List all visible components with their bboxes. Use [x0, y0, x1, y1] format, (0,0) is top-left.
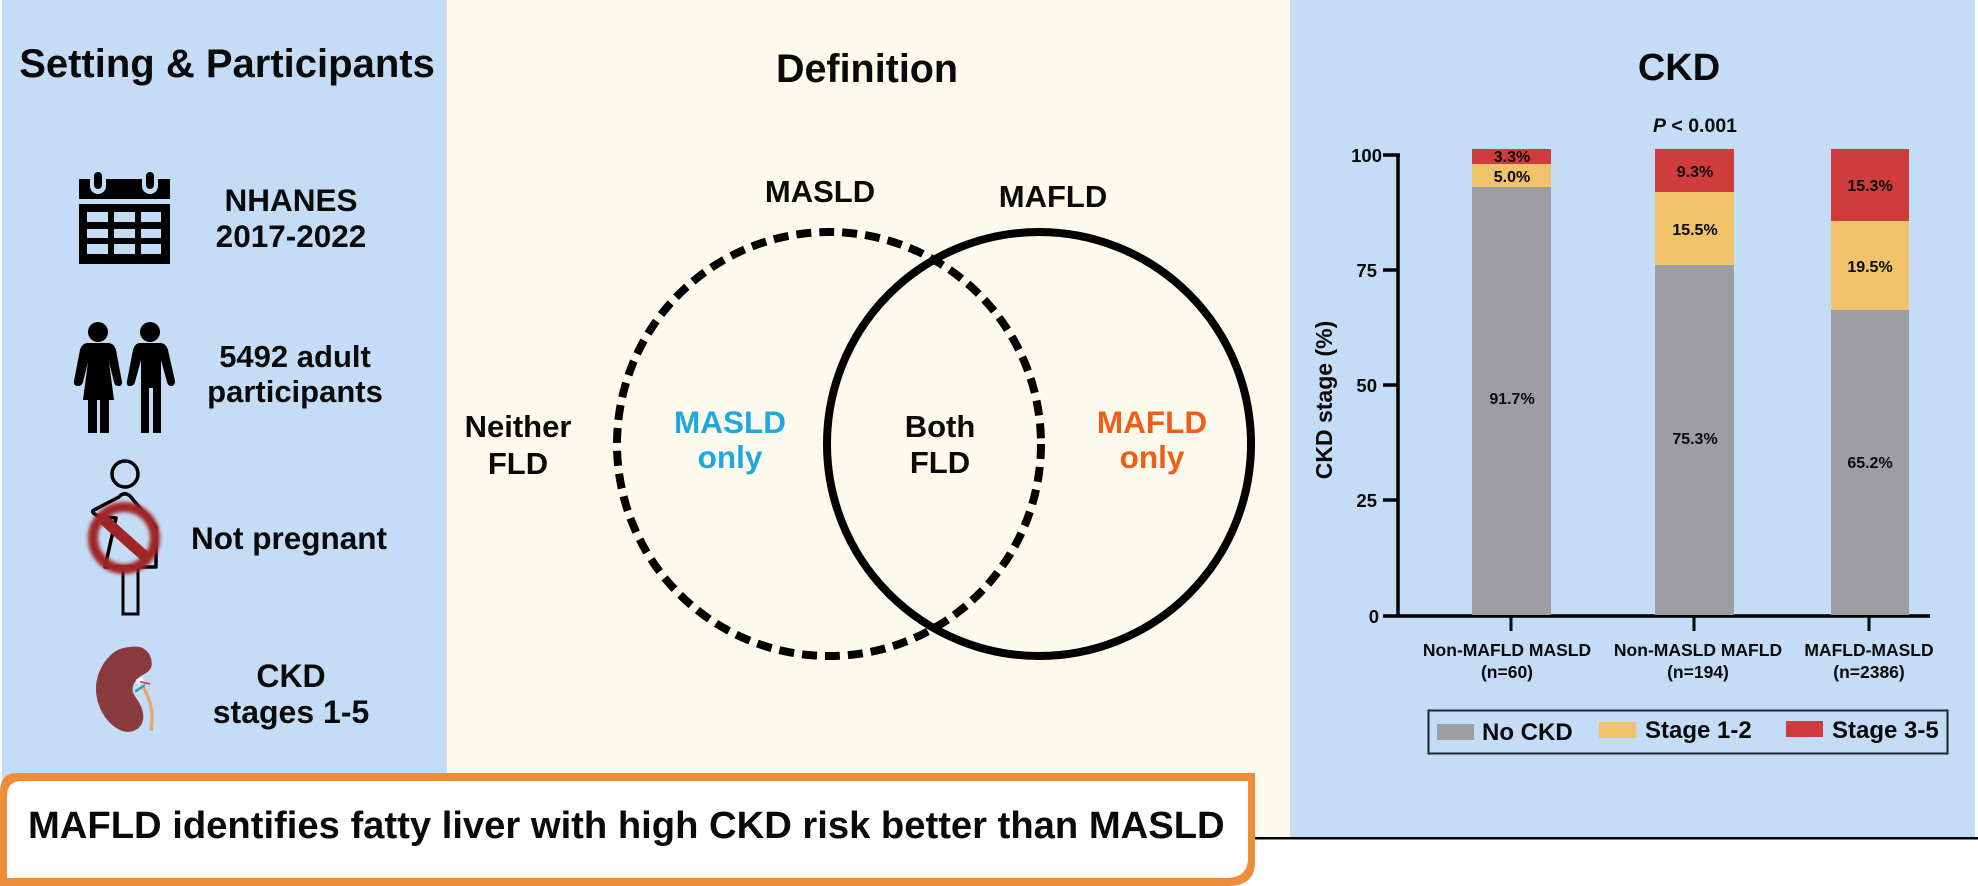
bar: non-MAFLD MASLD: 5.0%: [1494, 169, 1530, 186]
label: both FLD: Both: [905, 409, 975, 444]
x axis labels: [1423, 640, 1934, 682]
p value: P < 0.001: [1653, 115, 1737, 137]
text: NHANES 2017-2022: [216, 182, 366, 254]
label: neither FLD: [465, 409, 571, 481]
venn: MAFLD solid circle: [827, 232, 1251, 656]
panel: CKD: [1290, 0, 1975, 837]
x axis labels: Non-MASLD MAFLD: [1614, 640, 1782, 660]
text: CKD stages 1-5: CKD: [256, 658, 326, 694]
heading: CKD: CKD: [1638, 47, 1720, 89]
bar: non-MAFLD MASLD: [1472, 149, 1551, 615]
bar: MAFLD-MASLD: [1831, 149, 1909, 615]
label: MASLD: MASLD: [765, 174, 875, 209]
y axis: 25: [1356, 490, 1377, 511]
callout: conclusion: MAFLD identifies fatty liver with high CKD risk better than MASLD: [28, 804, 1225, 847]
bar: MAFLD-MASLD: 19.5%: [1847, 259, 1893, 276]
label: MASLD only: [674, 404, 786, 475]
x axis labels: MAFLD-MASLD: [1804, 640, 1934, 660]
bar: non-MASLD MAFLD: 9.3%: [1677, 164, 1713, 181]
label: MAFLD only: MAFLD: [1097, 404, 1207, 440]
label: neither FLD: Neither: [465, 409, 571, 444]
text: NHANES 2017-2022: 2017-2022: [216, 218, 366, 254]
label: MAFLD: MAFLD: [999, 179, 1107, 214]
text: 5492 adult participants: 5492 adult: [219, 339, 371, 374]
label: neither FLD: FLD: [488, 446, 548, 481]
heading: setting and participants: Setting & Participants: [19, 42, 435, 86]
label: MASLD only: MASLD: [674, 404, 786, 440]
callout: conclusion: [0, 773, 1255, 886]
x axis labels: Non-MAFLD MASLD: [1423, 640, 1591, 660]
icon: woman and man: [74, 322, 175, 433]
panel: setting and participants: [2, 0, 447, 837]
x axis labels: (n=60): [1481, 662, 1533, 682]
y axis: [1351, 145, 1930, 631]
label: MASLD only: only: [698, 439, 763, 475]
bar: MAFLD-MASLD: 15.3%: [1847, 178, 1893, 195]
text: NHANES 2017-2022: NHANES: [224, 182, 358, 218]
bar: non-MAFLD MASLD: 91.7%: [1489, 391, 1535, 408]
y axis: 50: [1356, 375, 1377, 396]
text: not pregnant: Not pregnant: [191, 520, 387, 556]
icon: calendar: [79, 170, 170, 264]
text: 5492 adult participants: [207, 339, 383, 409]
label: both FLD: [905, 409, 975, 480]
bar: non-MASLD MAFLD: 15.5%: [1672, 222, 1718, 239]
bar: non-MASLD MAFLD: 75.3%: [1672, 431, 1718, 448]
bar: non-MAFLD MASLD: 3.3%: [1494, 149, 1530, 166]
icon: not pregnant: [93, 461, 156, 614]
chart: stacked bars of CKD stage: [1311, 145, 1934, 682]
legend: Stage 1-2: [1645, 717, 1752, 744]
icon: kidney: [96, 647, 152, 732]
y axis: 75: [1356, 260, 1377, 281]
legend: [1428, 710, 1948, 754]
bottom rule: [1255, 837, 1978, 840]
bar: MAFLD-MASLD: 65.2%: [1847, 455, 1893, 472]
x axis labels: (n=194): [1667, 662, 1729, 682]
legend: Stage 3-5: [1832, 717, 1939, 744]
panel: definition: [447, 0, 1290, 837]
y axis: 100: [1351, 145, 1382, 166]
text: CKD stages 1-5: stages 1-5: [213, 694, 369, 730]
text: 5492 adult participants: participants: [207, 374, 383, 409]
x axis labels: (n=2386): [1833, 662, 1905, 682]
text: CKD stages 1-5: [213, 658, 369, 730]
label: both FLD: FLD: [910, 445, 970, 480]
heading: definition: Definition: [776, 47, 958, 91]
legend: No CKD: [1482, 719, 1573, 746]
label: MAFLD only: only: [1120, 439, 1185, 475]
y axis title: CKD stage (%): [1311, 321, 1337, 479]
label: MAFLD only: [1097, 404, 1207, 475]
bar: non-MASLD MAFLD: [1655, 149, 1734, 615]
venn: MASLD dashed circle: [617, 232, 1041, 656]
y axis: 0: [1369, 606, 1379, 627]
